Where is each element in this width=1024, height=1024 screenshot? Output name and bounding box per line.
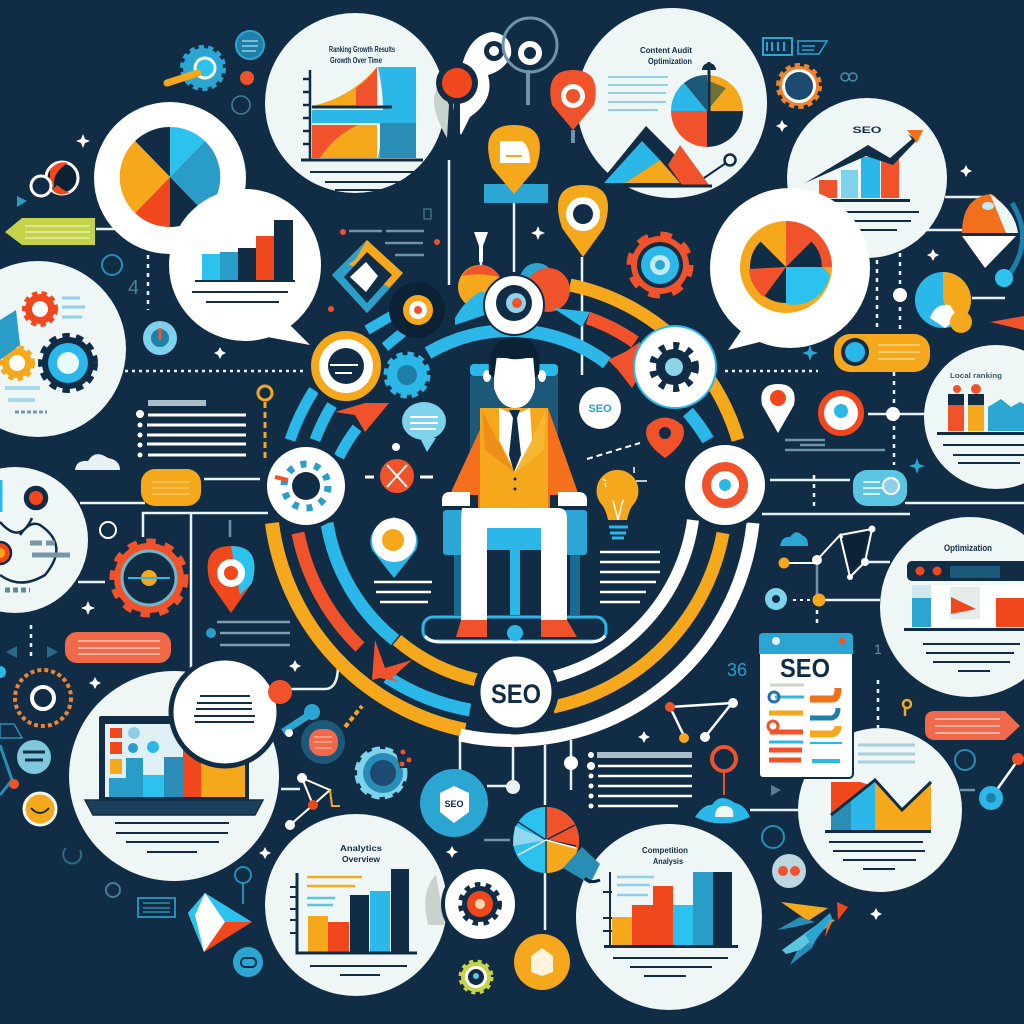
cyan arc bottom left (387, 677, 470, 710)
icon: chain links (31, 162, 78, 196)
text lines beside chair left (374, 582, 432, 602)
icon: blue cloud right (780, 532, 808, 546)
map pin: red left center (208, 546, 254, 613)
text list left (136, 400, 246, 458)
red arc top right (588, 318, 635, 342)
bubble: bottom-left chart (265, 814, 447, 996)
bar chart with arrow (805, 130, 923, 202)
hands and arm rests (442, 492, 587, 506)
yellow hex pin bottom (514, 934, 570, 990)
decorative sparkle group (76, 120, 972, 920)
icon: location pin cyan (370, 517, 418, 578)
icon: orange key right (903, 700, 911, 716)
tag: orange mid left (141, 469, 201, 506)
jacket (450, 408, 578, 508)
cyan arc left (327, 523, 395, 640)
target node right (817, 288, 907, 437)
bubble: bar chart left (169, 189, 321, 345)
pie wheel (745, 226, 830, 308)
heading: pie subtitle: Optimization (648, 57, 692, 66)
tag: red right (925, 711, 1020, 740)
gear: top right orange (779, 66, 819, 106)
text lines beside chair right (600, 552, 660, 602)
SEO center badge (477, 653, 555, 731)
heading: Competition (642, 846, 688, 855)
small top labels (763, 38, 857, 81)
bubble: bottom-right chart (576, 824, 762, 1010)
gear: top left with key (167, 48, 223, 88)
hex node bottom center: SEO (444, 799, 464, 809)
chair back (470, 364, 558, 456)
ring node: yellow menu (309, 329, 383, 403)
icon: small white ring left (100, 522, 116, 538)
heading: Optimization (944, 543, 992, 553)
bar chart (195, 220, 295, 282)
heading: second line: Overview (342, 855, 381, 864)
red arc left (298, 533, 360, 647)
cyan arc top (428, 331, 607, 363)
network left of chart (285, 773, 340, 830)
sparkles top (531, 226, 545, 240)
heading: chart title: Ranking Growth Results (329, 45, 395, 54)
legs (456, 508, 577, 637)
icon: smile circle left (24, 793, 56, 825)
gear: orange left (114, 543, 184, 613)
yellow ring with dashed stem (258, 386, 272, 460)
mini pie right (915, 272, 1024, 333)
map pin: yellow target (558, 185, 608, 257)
gear: red large top right (631, 236, 689, 294)
small label bottom left (63, 848, 251, 917)
tag: orange right (834, 334, 930, 372)
ring node: dark cog (634, 326, 716, 408)
bubble: left network (0, 467, 88, 613)
map pin: red top (550, 70, 596, 143)
icon: small round label: SEO (588, 403, 612, 415)
heading: second line: Analysis (653, 857, 684, 866)
outer yellow arc (272, 523, 465, 730)
icon: orange dumbbell circle (772, 854, 806, 888)
heading: pie title: Content Audit (640, 46, 692, 55)
network icon right (765, 526, 876, 610)
icon: outline pictogram left (17, 740, 51, 774)
bubble: right browser panel (880, 517, 1024, 697)
bubble: laptop (69, 671, 279, 881)
map pin: white and red right (761, 384, 795, 433)
gear: dark (42, 337, 94, 389)
gear: yellow (2, 348, 32, 378)
cyan right segment (688, 412, 708, 440)
text list lower right (587, 752, 692, 808)
SEO document card (759, 633, 853, 778)
icon: teal triangle left (17, 196, 27, 207)
hex node bottom center (420, 769, 488, 837)
ring icon left (15, 670, 71, 726)
numeric label: 36 (727, 660, 747, 680)
bubble: right shallow chart (924, 345, 1024, 489)
laptop (85, 716, 263, 815)
small text rows above diamond (340, 209, 440, 255)
small text rows under pin right (785, 440, 885, 450)
bubble: laptop callout (171, 658, 279, 766)
outer top right arc (570, 285, 738, 440)
icon: small outline coin (232, 96, 250, 114)
icon: round menu top left (236, 31, 264, 59)
network icon lower right (665, 698, 738, 743)
mountain chart (597, 126, 736, 186)
heading: Local ranking (950, 373, 1002, 380)
node: small white bottom (506, 780, 520, 794)
bubble: upper-right growth chart (787, 98, 947, 258)
white blob with red orb at top (434, 32, 511, 140)
bar chart (603, 872, 738, 948)
text list lower left (206, 622, 290, 645)
cyan left segments (290, 390, 314, 440)
tag: yellow-green left (5, 218, 95, 245)
tag: red left (65, 632, 171, 663)
small triangles lower left (6, 646, 58, 658)
network icon (0, 487, 56, 582)
magnifier ring at top (503, 18, 557, 105)
pie bottom center (513, 807, 600, 884)
key icon lower left (283, 704, 362, 737)
small grey numeral right: 1 (874, 641, 882, 657)
bar chart (937, 384, 1024, 435)
icon: grey triangle right (771, 785, 781, 796)
chair base (423, 510, 606, 642)
rocket lower right (777, 902, 848, 965)
connector lines (31, 160, 1024, 930)
icon: light bulb (596, 467, 647, 538)
icon: white cloud left (75, 454, 120, 470)
area chart (825, 780, 931, 833)
document list items (768, 685, 842, 761)
browser window (904, 561, 1024, 631)
pin with cloud lower right (695, 747, 750, 824)
small cyan sparkles right (802, 345, 925, 474)
tag: cyan right (853, 470, 907, 506)
bubble: gears far left (0, 261, 126, 437)
ring node: left sun (265, 445, 347, 527)
ring node: yellow target (389, 282, 445, 338)
gear: lower center-left (357, 745, 415, 797)
heading: Analytics (340, 844, 383, 853)
icon: arrow star lower left (372, 640, 412, 682)
icon: small round label (579, 387, 621, 429)
icon: arrow star upper right (608, 342, 640, 388)
cyan small button left (143, 321, 177, 355)
node: small white at list (564, 756, 578, 770)
gear green bottom (461, 962, 491, 992)
ring node: right target (683, 443, 767, 527)
head (483, 337, 546, 408)
bubble: top-right pie and mountain chart (577, 8, 767, 198)
cyan swoops top left (367, 312, 415, 347)
bubble: pie chart left (94, 102, 246, 254)
ring node: diamond (332, 240, 403, 313)
icon: outline sack and numeral: 4 (128, 277, 139, 299)
area chart (301, 67, 423, 160)
bubble: right mountain chart (798, 728, 962, 892)
map pin: far right top (962, 194, 1023, 287)
icon: speech bubble cyan (402, 402, 446, 452)
small cyan label far left (0, 724, 22, 738)
central rings (272, 285, 753, 740)
white inner arc (553, 520, 693, 677)
icon: arrow star upper left (335, 403, 389, 432)
ring node: top center (455, 263, 590, 335)
icon: red orb with link (365, 443, 433, 493)
bar chart (290, 869, 417, 953)
pie chart (671, 62, 743, 147)
small cyan node bottom left (233, 947, 263, 977)
gear: red (25, 294, 55, 324)
funnel above center node (474, 232, 488, 262)
heading: SEO: SEO (780, 653, 830, 683)
bubble: right pie chart (710, 188, 870, 350)
SEO text: SEO (491, 679, 541, 709)
paper plane bottom left (188, 893, 252, 952)
icon: outline sack and numeral (102, 255, 139, 299)
yellow arc bottom left (397, 640, 477, 680)
person in chair (423, 337, 606, 642)
heading: growth title: SEO (852, 125, 882, 135)
icon: map pin red center right (646, 418, 684, 458)
red node left of laptop callout (268, 680, 292, 704)
cyan edge node far left (0, 666, 19, 795)
heading: chart subtitle: Growth Over Time (330, 56, 382, 65)
pie chart (120, 127, 220, 227)
gear node bottom (425, 867, 517, 941)
red label node (301, 720, 345, 764)
white outer arc (460, 523, 753, 740)
cyan node far right (979, 753, 1024, 810)
yellow arc right (553, 533, 723, 707)
bubble: top-left chart (265, 13, 445, 193)
small red dots (240, 71, 334, 312)
icon: cyan gear (387, 355, 427, 395)
icon: outline knot right (762, 750, 975, 848)
map pin: yellow mail (484, 125, 548, 203)
shirt and tie (499, 408, 532, 472)
